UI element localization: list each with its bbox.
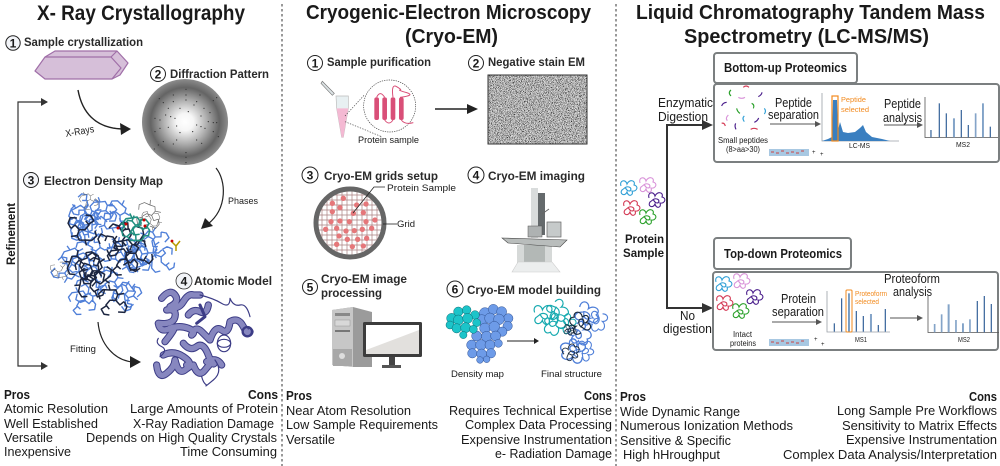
LC column icon	[769, 337, 825, 348]
title: LC-MS/MS: Spectrometry (LC-MS/MS)	[684, 26, 929, 48]
branching arrow: digestion routes: Enzymatic	[658, 95, 713, 110]
pros list: Atomic Resolution	[4, 401, 108, 416]
step 4 badge and label: 4	[181, 274, 188, 288]
branching arrow: digestion routes: No	[680, 308, 695, 323]
tab: bottom-up proteomics	[714, 53, 857, 83]
pros list: Near Atom Resolution	[286, 403, 411, 418]
step 1: 1	[312, 56, 319, 70]
pros list	[286, 388, 438, 447]
small peptides: Small peptides	[718, 136, 768, 145]
step 5	[302, 272, 407, 300]
MS2 spectrum, top-down	[928, 295, 999, 344]
title: X-ray crystallography: X- Ray Crystallography	[37, 1, 245, 25]
LC-MS chromatogram: selected	[841, 105, 869, 114]
grid illustration	[316, 183, 456, 257]
arrow: X-rays: X-Rays	[65, 124, 95, 140]
peptide analysis label and arrow	[883, 96, 922, 125]
MS2 spectrum, bottom-up	[925, 97, 998, 149]
refinement bracket arrow: Refinement	[4, 203, 18, 265]
peptide separation label and arrow: separation	[768, 107, 819, 122]
step 4: Cryo-EM imaging	[488, 169, 585, 183]
cons list: Time Consuming	[180, 444, 277, 459]
title: Cryo-EM: Cryogenic-Electron Microscopy	[306, 2, 592, 24]
cons list	[783, 389, 997, 462]
intact proteins	[716, 274, 763, 348]
step 2 badge and label: Diffraction Pattern	[170, 67, 269, 81]
step 4 badge and label: Atomic Model	[194, 274, 272, 288]
density map: Density map	[451, 369, 504, 380]
MS1 spectrum: selected	[855, 299, 879, 306]
peptide analysis label and arrow: Peptide	[884, 96, 921, 111]
step 1 badge and label: 1	[10, 36, 17, 50]
cons list: Long Sample Pre Workflows	[837, 403, 997, 418]
tab: top-down proteomics: Top-down Proteomics	[724, 246, 842, 261]
pros list: Pros	[4, 387, 30, 402]
panel: X-ray crystallography	[4, 1, 278, 459]
cons list: Expensive Instrumentation	[461, 432, 612, 447]
branching arrow: digestion routes	[658, 95, 713, 336]
refinement bracket arrow	[4, 98, 48, 370]
peptide separation label and arrow	[768, 95, 820, 124]
branching arrow: digestion routes: Digestion	[658, 109, 708, 124]
atomic model ribbon	[157, 292, 252, 386]
MS2 spectrum, top-down: MS2	[958, 337, 970, 344]
cons list: Expensive Instrumentation	[846, 432, 997, 447]
protein sample cluster: Protein	[625, 232, 664, 246]
step 6: Cryo-EM model building	[467, 283, 601, 297]
MS1 spectrum: MS1	[855, 337, 867, 344]
cons list: Cons	[248, 387, 278, 402]
arrow: MS1 to MS2	[890, 317, 922, 319]
pros list: Sensitive & Specific	[620, 433, 731, 448]
small peptides: (8>aa>30)	[726, 145, 760, 154]
arrow: phases: Phases	[228, 196, 258, 207]
cons list	[86, 387, 278, 459]
step 3: Cryo-EM grids setup	[324, 169, 438, 183]
step 3 badge and label: Electron Density Map	[44, 174, 163, 188]
LC column icon: +	[820, 152, 824, 158]
title: Cryo-EM: (Cryo-EM)	[405, 26, 498, 48]
LC-MS chromatogram: Peptide	[841, 95, 866, 104]
MS2 spectrum, bottom-up: MS2	[956, 142, 970, 149]
LC column icon	[769, 149, 824, 158]
step 5: processing	[321, 286, 382, 300]
step 5: Cryo-EM image	[321, 272, 407, 286]
title: LC-MS/MS: Liquid Chromatography Tandem Mass	[636, 2, 985, 24]
panel: LC-MS/MS	[620, 2, 999, 462]
step 6: 6	[452, 282, 459, 296]
pros list: Inexpensive	[4, 444, 71, 459]
electron density stick model	[47, 189, 182, 323]
protein sample cluster	[621, 178, 665, 260]
icon: protein sample tube: Protein sample	[358, 135, 419, 146]
peptide separation label and arrow: Peptide	[775, 95, 812, 110]
icon: computer	[332, 307, 422, 368]
tab: bottom-up proteomics: Bottom-up Proteomics	[724, 60, 847, 75]
micrograph: negative stain EM	[488, 75, 587, 144]
branching arrow: digestion routes: digestion	[663, 321, 712, 336]
cons list: Large Amounts of Protein	[130, 401, 278, 416]
step 2: 2	[473, 56, 480, 70]
pros list: Low Sample Requirements	[286, 417, 438, 432]
icon: crystal	[35, 51, 128, 79]
intact proteins: Intact	[733, 330, 753, 339]
cons list: Depends on High Quality Crystals	[86, 430, 277, 445]
protein separation label and arrow: Protein	[781, 291, 816, 306]
pros list: Wide Dynamic Range	[620, 404, 740, 419]
step 2 badge and label: 2	[155, 68, 162, 82]
diffraction pattern	[142, 79, 228, 165]
cons list: Complex Data Processing	[465, 417, 612, 432]
cons list: Complex Data Analysis/Interpretation	[783, 447, 997, 462]
arrow: purification to stain	[435, 104, 478, 114]
step 1 badge and label: Sample crystallization	[24, 35, 143, 49]
pros list	[620, 389, 793, 462]
pros list: Versatile	[286, 432, 335, 447]
pros list: High hHroughput	[623, 447, 720, 462]
arrow: X-rays	[65, 90, 131, 140]
pros list: Pros	[620, 389, 646, 404]
pros list: Pros	[286, 388, 312, 403]
LC column icon: +	[814, 337, 818, 343]
arrow: phases	[201, 168, 258, 229]
icon: protein sample tube	[321, 80, 419, 146]
LC column icon: +	[821, 342, 825, 348]
cons list	[449, 388, 612, 461]
cons list: e- Radiation Damage	[495, 446, 612, 461]
step 4: 4	[473, 168, 480, 182]
step 1: Sample purification	[327, 55, 431, 69]
icon: electron microscope	[502, 188, 567, 272]
arrow: fitting: Fitting	[70, 344, 96, 355]
panel: Cryo-EM	[286, 2, 612, 461]
tab: top-down proteomics	[714, 238, 851, 269]
panel: bottom-up workflow	[714, 84, 999, 162]
small peptides	[718, 86, 768, 154]
MS1 spectrum: Proteoform	[855, 291, 887, 298]
panel: top-down workflow	[713, 271, 999, 350]
title: LC-MS/MS	[636, 2, 985, 48]
grid illustration: Protein Sample	[387, 183, 456, 194]
cons list: Cons	[584, 388, 612, 403]
proteoform analysis label	[884, 271, 940, 299]
density map	[446, 304, 513, 380]
pros list: Well Established	[4, 416, 98, 431]
proteoform analysis label: analysis	[893, 284, 932, 299]
title: Cryo-EM	[306, 2, 592, 48]
final structure	[534, 298, 609, 380]
arrow: density map to structure	[507, 338, 539, 344]
cons list: Sensitivity to Matrix Effects	[842, 418, 997, 433]
LC-MS chromatogram: LC-MS	[849, 143, 870, 150]
cons list: Requires Technical Expertise	[449, 403, 612, 418]
pros list: Numerous Ionization Methods	[620, 418, 793, 433]
protein separation label and arrow	[772, 291, 824, 322]
peptide analysis label and arrow: analysis	[883, 110, 922, 125]
pros list: Versatile	[4, 430, 53, 445]
LC column icon: +	[812, 150, 816, 156]
step 2: Negative stain EM	[488, 55, 585, 69]
step 3: 3	[307, 168, 314, 182]
final structure: Final structure	[541, 369, 602, 380]
proteoform analysis label: Proteoform	[884, 271, 940, 286]
grid illustration: Grid	[397, 219, 415, 230]
protein separation label and arrow: separation	[772, 304, 824, 319]
step 3 badge and label: 3	[28, 174, 35, 188]
LC-MS chromatogram	[822, 93, 899, 150]
pros list	[4, 387, 108, 459]
MS1 spectrum	[827, 290, 890, 344]
cons list: X-Ray Radiation Damage	[133, 416, 274, 431]
protein sample cluster: Sample	[623, 246, 664, 260]
arrow: fitting	[70, 322, 141, 368]
intact proteins: proteins	[730, 339, 756, 348]
step 5: 5	[307, 280, 314, 294]
